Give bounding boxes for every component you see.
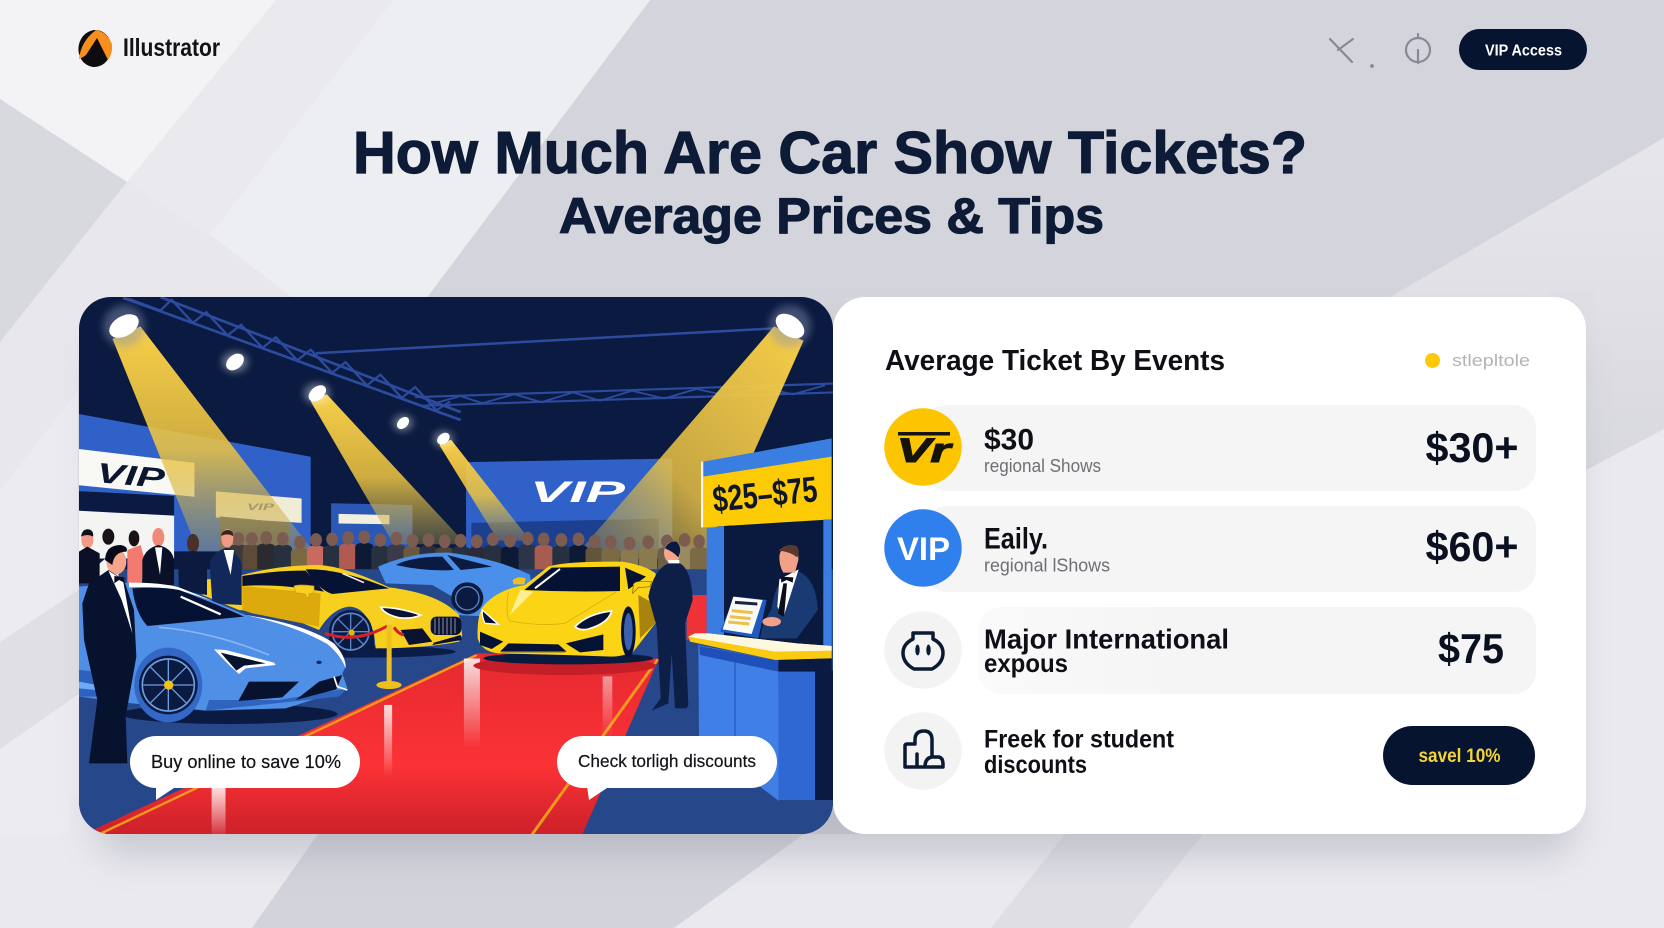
icon: close cross <box>1330 39 1373 67</box>
button: VIP Access <box>1459 29 1587 70</box>
legend: stlepltole <box>1452 351 1530 370</box>
row: early: $60+ <box>1426 523 1518 570</box>
icon: VIP badge: VIP <box>897 531 950 567</box>
yellow back car <box>202 565 462 658</box>
stanchion and rope <box>325 618 404 689</box>
VIP logo, small sign: VIP <box>247 502 276 512</box>
row: regional shows: regional Shows <box>984 456 1101 476</box>
speech bubble: discounts: Check torligh discounts <box>578 751 756 771</box>
booth attendant <box>760 545 818 638</box>
row: major international expos: Major International <box>984 624 1229 654</box>
row: major international expos: expous <box>984 648 1068 678</box>
title <box>353 120 1307 244</box>
title line 1: How Much Are Car Show Tickets? <box>353 120 1307 186</box>
icon: yellow badge <box>884 408 962 486</box>
sign 3 <box>331 503 412 548</box>
ceiling truss <box>123 297 833 420</box>
row: early <box>884 506 1536 592</box>
button: save 10%: savel 10% <box>1418 746 1501 767</box>
row: regional shows: $30 <box>984 424 1034 456</box>
icon: plug <box>903 633 943 669</box>
hall backdrop <box>70 291 846 841</box>
row: major international expos: $75 <box>1438 625 1504 672</box>
row: major international expos <box>884 607 1536 694</box>
counter <box>688 633 832 660</box>
carpet shadow <box>473 660 657 675</box>
logo wordmark: Illustrator <box>123 34 220 62</box>
VIP logo, left sign: VIP <box>95 457 166 494</box>
speech bubble: buy online: Buy online to save 10% <box>151 751 341 772</box>
logo <box>76 28 220 69</box>
standing man <box>648 542 693 711</box>
row: student discounts <box>884 712 1535 790</box>
panel shadow <box>95 330 1575 855</box>
foreground man in tuxedo <box>82 545 136 763</box>
logo icon <box>76 28 114 69</box>
mirror <box>513 577 526 584</box>
spotlights <box>103 305 811 447</box>
left sign white <box>70 448 194 497</box>
icon: leaf circle <box>1406 34 1430 63</box>
button: save 10% <box>1383 726 1535 785</box>
light beams <box>112 326 313 551</box>
floor <box>70 569 846 841</box>
button: VIP Access: VIP Access <box>1485 42 1562 60</box>
icon: VIP badge <box>884 509 962 587</box>
clipboard <box>720 597 767 638</box>
blue front car <box>79 583 347 724</box>
row: student discounts: discounts <box>984 751 1087 779</box>
central wall <box>466 459 672 551</box>
ticket booth <box>648 438 835 801</box>
blue back car <box>378 553 533 617</box>
row: regional shows: $30+ <box>1426 424 1518 471</box>
yellow front car <box>473 562 657 675</box>
sign 2 <box>216 491 302 523</box>
title line 2: Average Prices & Tips <box>559 188 1104 244</box>
VIP logo, central wall: VIP <box>530 476 627 509</box>
row: early: regional lShows <box>984 556 1110 576</box>
booth walls <box>701 462 703 527</box>
row: regional shows <box>884 405 1536 491</box>
carpet behind booth <box>687 595 707 640</box>
row: early: Eaily. <box>984 522 1048 556</box>
cars and visitors, left <box>79 528 533 763</box>
icon: student building <box>905 731 943 767</box>
panel: car show scene <box>70 291 846 841</box>
back crowd <box>229 530 707 570</box>
booth price sign: $25–$75 <box>711 468 819 520</box>
red carpet <box>70 653 659 841</box>
left wall <box>79 414 311 551</box>
legend <box>1425 351 1530 370</box>
icon: yellow badge: Vr <box>896 432 953 470</box>
speech bubble: discounts <box>557 736 777 800</box>
front left crowd <box>79 528 242 605</box>
panel heading: Average Ticket By Events <box>885 345 1225 377</box>
row: student discounts: Freek for student <box>984 726 1175 754</box>
panel: average ticket by events <box>833 297 1586 834</box>
booth base <box>698 645 779 801</box>
speech bubble: buy online <box>130 736 360 800</box>
car body <box>477 562 657 657</box>
